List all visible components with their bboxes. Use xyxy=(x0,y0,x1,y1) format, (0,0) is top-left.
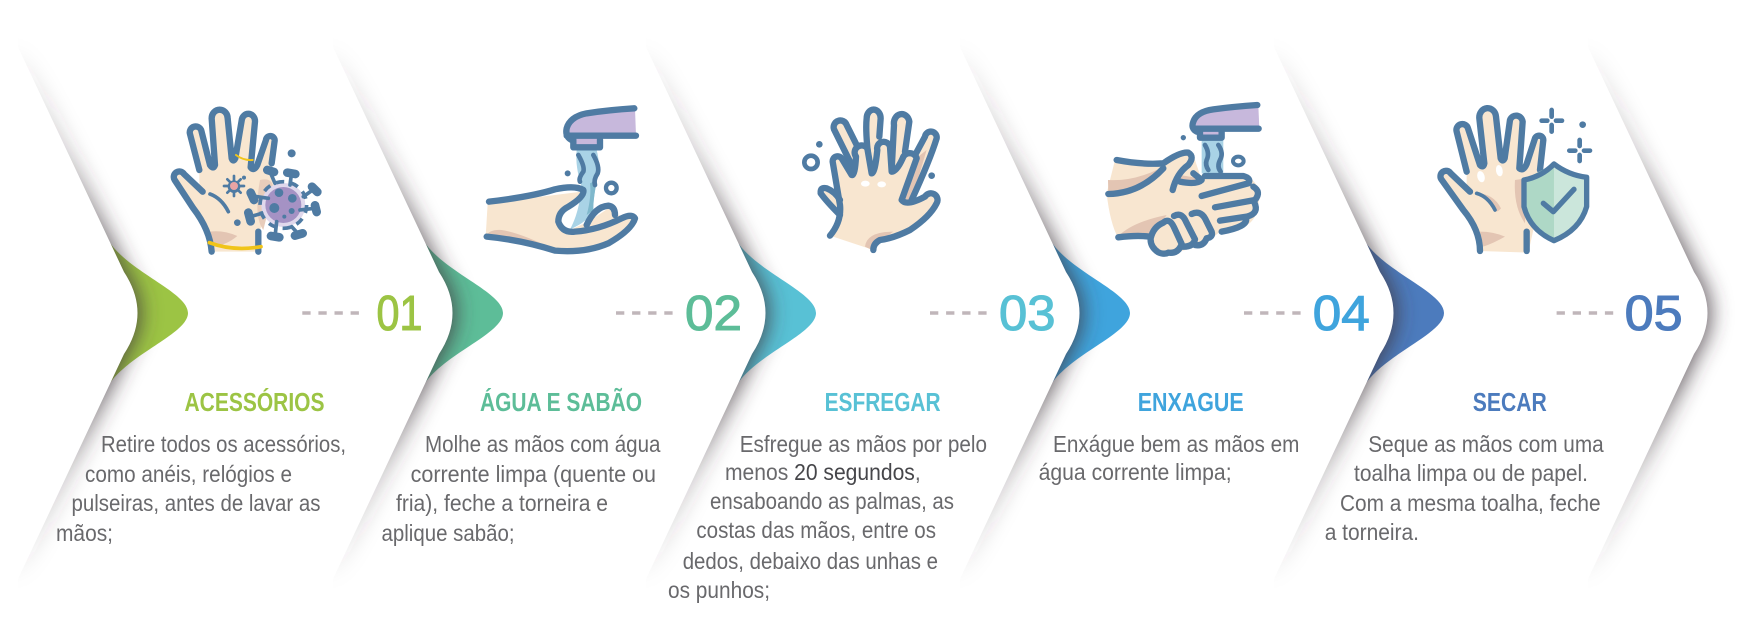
connector dashes xyxy=(302,311,361,315)
text block: os punhos; xyxy=(668,577,770,603)
number 03: 03 xyxy=(999,287,1056,341)
heading: ÁGUA E SABÃO xyxy=(480,387,642,417)
text block: fria), feche a torneira e xyxy=(396,490,608,516)
number 05: 05 xyxy=(1625,287,1683,341)
number 02: 02 xyxy=(685,287,742,341)
panel: step 5 secar xyxy=(1325,108,1683,545)
connector dashes xyxy=(616,311,675,315)
text block: água corrente limpa; xyxy=(1039,459,1232,485)
tab: step 2 xyxy=(423,240,503,386)
text block: Enxágue bem as mãos em xyxy=(1053,431,1299,457)
panel: step 1 acessórios xyxy=(56,110,422,546)
tab: step 1 xyxy=(108,240,188,386)
text block xyxy=(1325,431,1604,545)
text block: menos 20 segundos, xyxy=(725,459,921,485)
text block: ensaboando as palmas, as xyxy=(710,488,954,514)
panel: step 2 água e sabão xyxy=(382,108,742,546)
text block: Esfregue as mãos por pelo xyxy=(740,431,987,457)
tab: step 3 xyxy=(736,240,816,386)
text block: a torneira. xyxy=(1325,519,1419,545)
icon: hand under faucet xyxy=(486,108,636,251)
number 01: 01 xyxy=(376,287,422,341)
tab: step 4 xyxy=(1050,240,1130,386)
text block: pulseiras, antes de lavar as xyxy=(72,490,320,516)
text block: como anéis, relógios e xyxy=(85,461,292,487)
icon: hand with virus and rings xyxy=(174,110,317,252)
text block: corrente limpa (quente ou xyxy=(411,461,656,487)
text block xyxy=(1039,431,1299,485)
text block: toalha limpa ou de papel. xyxy=(1354,460,1588,486)
heading: ENXAGUE xyxy=(1138,389,1244,417)
panel: step 3 esfregar xyxy=(668,110,1056,603)
text block: mãos; xyxy=(56,520,113,546)
connector dashes xyxy=(1244,311,1303,315)
number 04: 04 xyxy=(1313,287,1370,341)
text block: costas das mãos, entre os xyxy=(696,517,936,543)
icon: overlapping hands rubbing xyxy=(804,110,938,251)
text block xyxy=(56,431,346,546)
heading: ESFREGAR xyxy=(825,389,941,417)
icon: clean hand with shield xyxy=(1440,108,1590,253)
text block: Com a mesma toalha, feche xyxy=(1340,490,1601,516)
connector dashes xyxy=(930,311,989,315)
text block xyxy=(382,431,661,546)
connector dashes xyxy=(1557,311,1615,315)
heading: ACESSÓRIOS xyxy=(184,387,324,417)
icon: hands rinsing under faucet xyxy=(1107,105,1259,254)
text block: dedos, debaixo das unhas e xyxy=(683,548,938,574)
text block xyxy=(668,431,987,603)
text block: Retire todos os acessórios, xyxy=(101,431,346,457)
tab: step 5 xyxy=(1364,240,1444,386)
text block: Seque as mãos com uma xyxy=(1368,431,1604,457)
panel: step 4 enxague xyxy=(1039,105,1370,485)
text block: Molhe as mãos com água xyxy=(425,431,661,457)
text block: aplique sabão; xyxy=(382,520,514,546)
heading: SECAR xyxy=(1473,389,1547,417)
